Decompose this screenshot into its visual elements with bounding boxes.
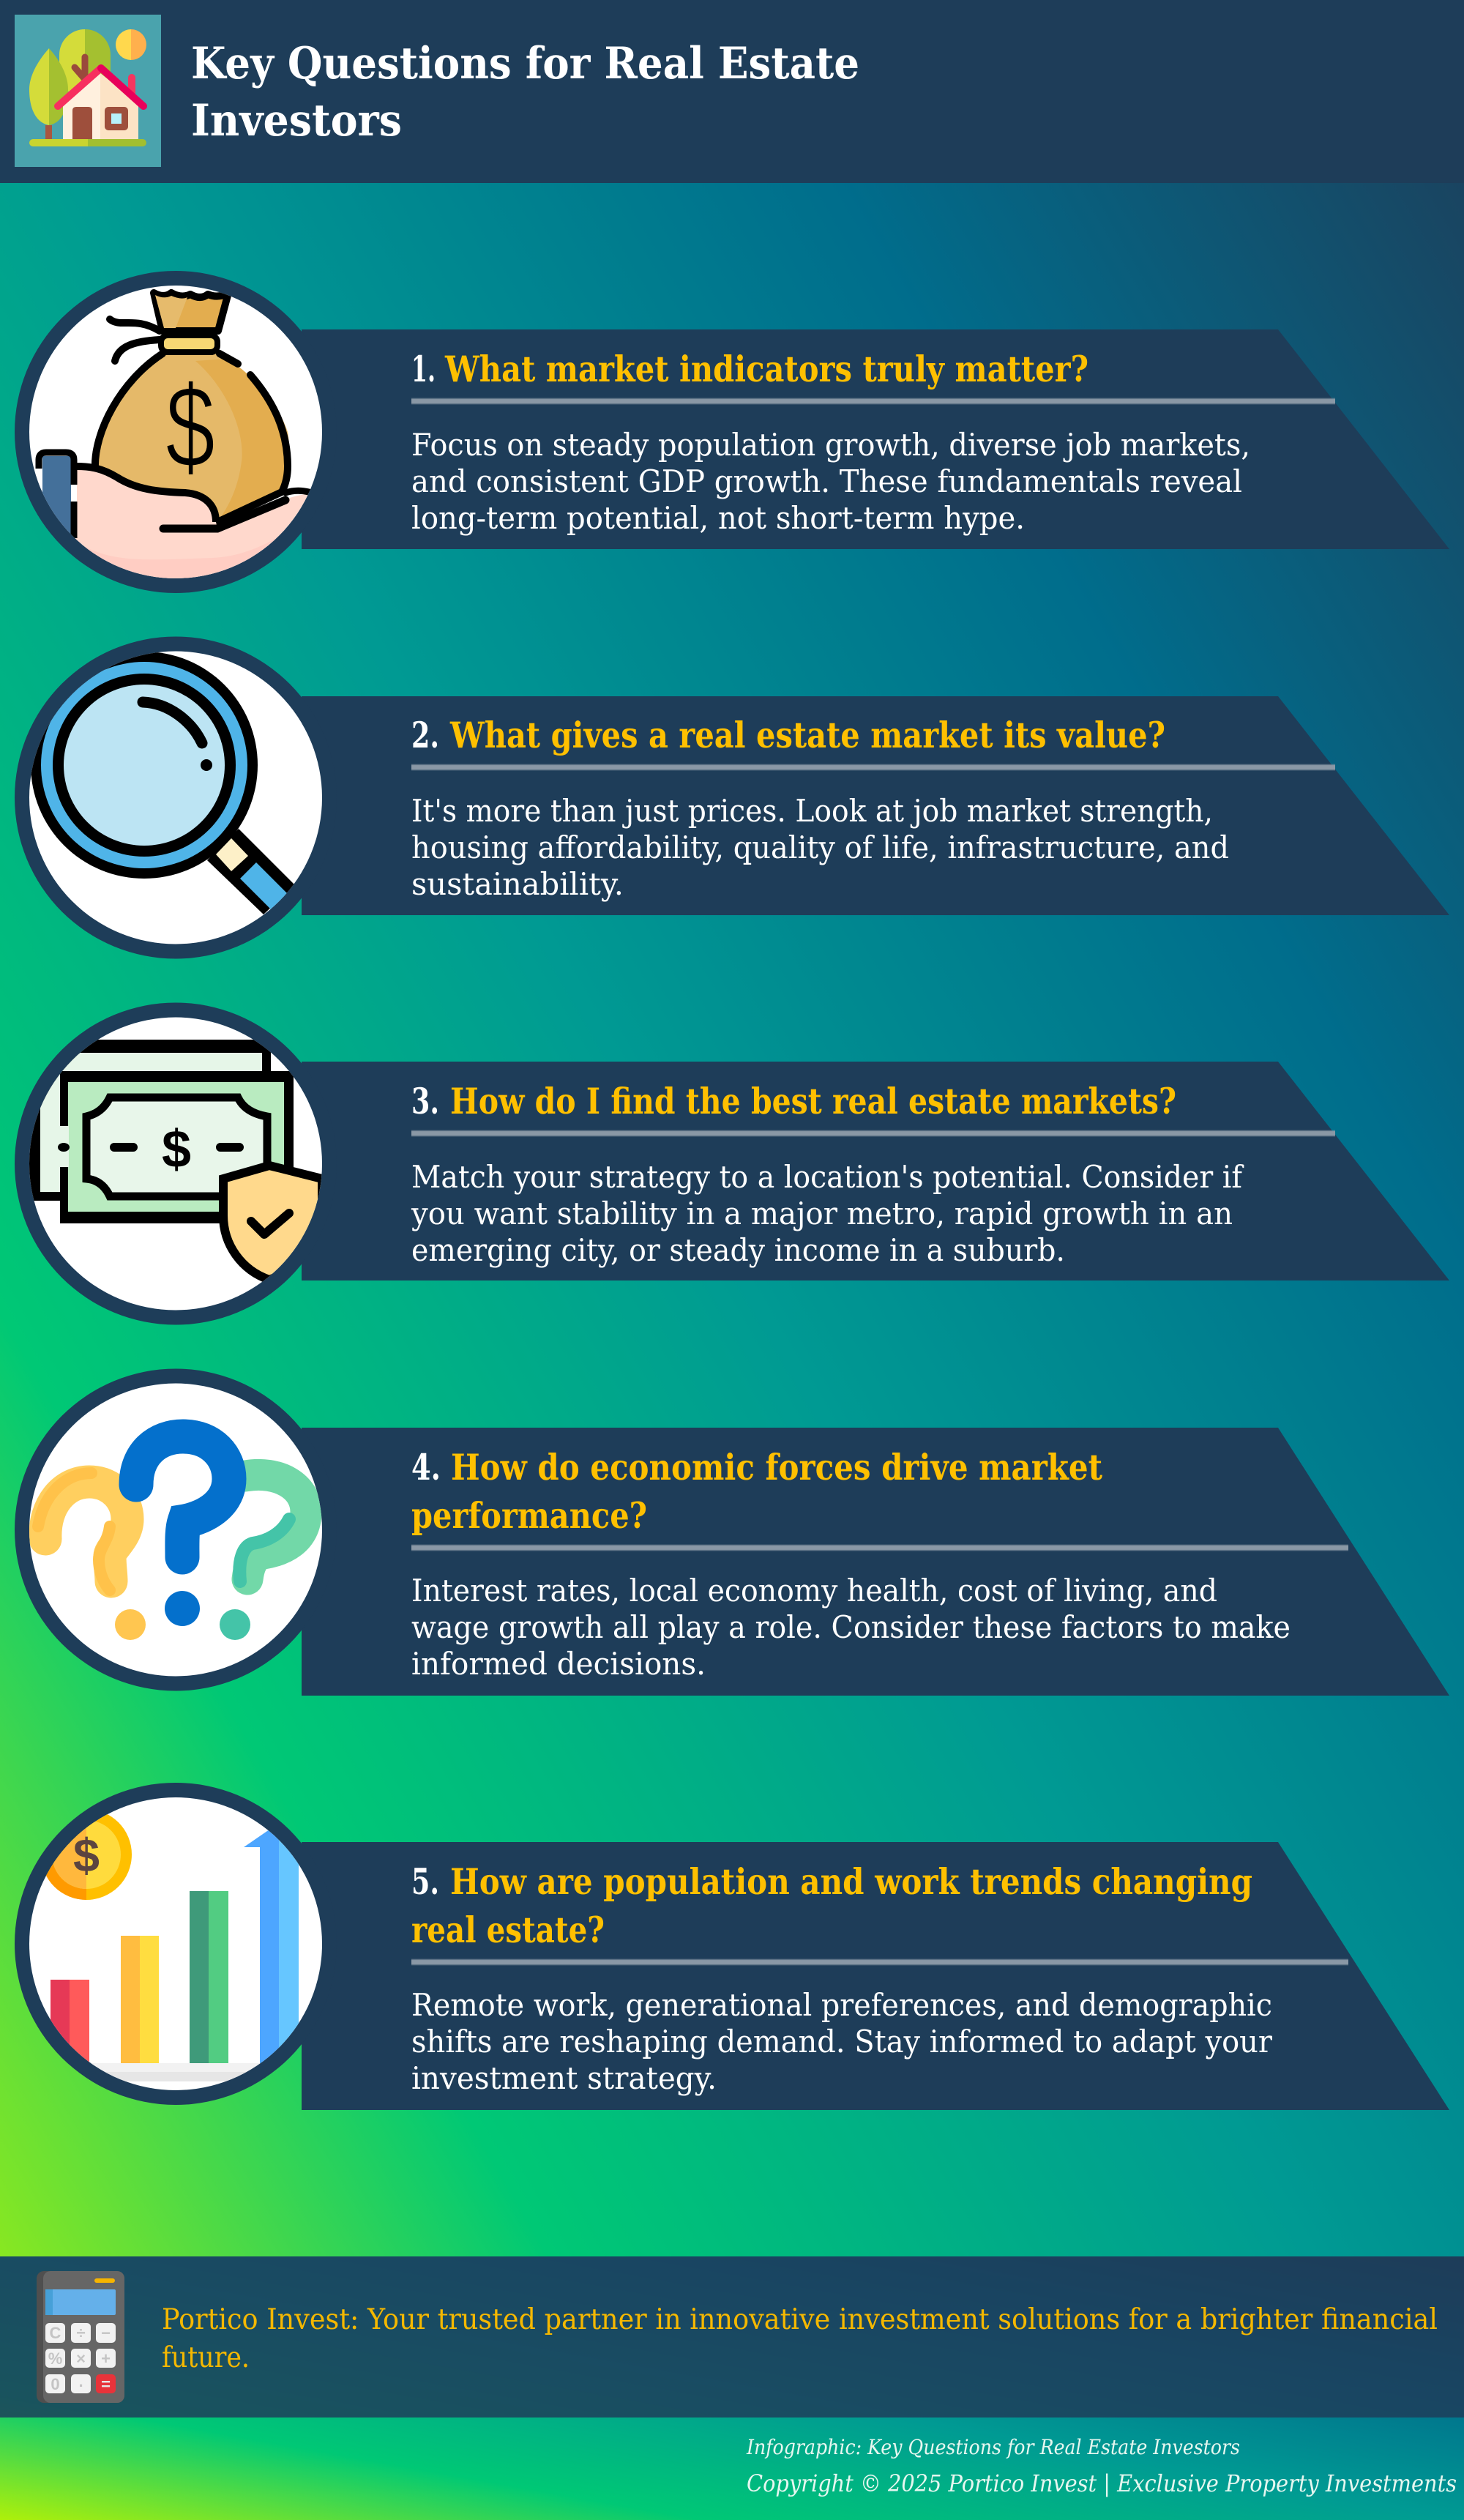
tagline: future. — [162, 2341, 250, 2374]
icon: calculator: % — [48, 2349, 62, 2368]
icon: banknote and shield — [15, 1003, 337, 1325]
body: question 5 — [411, 1987, 1273, 2096]
icon: calculator — [37, 2271, 124, 2403]
icon: calculator: ÷ — [76, 2324, 86, 2342]
icon: magnifying glass — [15, 637, 337, 959]
body: question 1 — [411, 427, 1250, 536]
heading: question 1: What market indicators truly matter? — [444, 348, 1088, 390]
icon: rising bar chart with coin: $ — [73, 1829, 100, 1882]
icon: money bag in hand: $ — [165, 361, 215, 492]
body: question 4: Interest rates, local economy health, cost of living, and — [411, 1573, 1217, 1608]
heading: question 3: How do I find the best real estate markets? — [450, 1080, 1176, 1122]
body: question 1: and consistent GDP growth. These fundamentals reveal — [411, 463, 1242, 499]
body: question 2: sustainability. — [411, 866, 624, 902]
icon: calculator: × — [76, 2349, 86, 2368]
heading: question 1: 1. — [411, 348, 436, 390]
icon: calculator: C — [50, 2324, 61, 2342]
body: question 5: investment strategy. — [411, 2060, 717, 2096]
heading: question 4: 4. — [411, 1446, 441, 1488]
body: question 1: Focus on steady population growth, diverse job markets, — [411, 427, 1250, 463]
title: Key Questions for Real Estate — [191, 38, 859, 89]
icon: calculator: + — [101, 2349, 111, 2368]
body: question 2: housing affordability, quality of life, infrastructure, and — [411, 830, 1229, 865]
panel: question 5 — [15, 1783, 1449, 2110]
header — [0, 0, 1464, 183]
body: question 4 — [411, 1573, 1291, 1682]
icon: calculator: . — [78, 2372, 83, 2390]
body: question 4: informed decisions. — [411, 1646, 706, 1682]
credits — [746, 2435, 1457, 2497]
body: question 1: long-term potential, not short-term hype. — [411, 500, 1025, 536]
body: question 2 — [411, 793, 1229, 902]
body: question 2: It's more than just prices. Look at job market strength, — [411, 793, 1213, 829]
body: question 3: emerging city, or steady income in a suburb. — [411, 1232, 1065, 1268]
icon: calculator: = — [101, 2375, 111, 2393]
heading: question 4: performance? — [411, 1494, 647, 1537]
icon: money bag in hand — [15, 271, 337, 593]
title — [191, 38, 859, 146]
footer background — [0, 2256, 1464, 2520]
icon: rising bar chart with coin — [15, 1783, 337, 2105]
panel: question 4 — [15, 1369, 1449, 1696]
footer band — [0, 2256, 1464, 2418]
heading: question 3: 3. — [411, 1080, 439, 1122]
panel: question 1 — [15, 271, 1449, 593]
title: Investors — [191, 95, 402, 146]
heading: question 2: 2. — [411, 714, 439, 756]
panel: question 3 — [15, 1003, 1449, 1325]
heading: question 5: 5. — [411, 1860, 439, 1903]
icon: banknote and shield: $ — [162, 1120, 191, 1179]
heading: question 4: How do economic forces drive market — [451, 1446, 1102, 1488]
heading: question 5 — [411, 1860, 1252, 1951]
tagline — [162, 2303, 1438, 2374]
icon: calculator: − — [101, 2324, 111, 2342]
body: question 5: shifts are reshaping demand. Stay informed to adapt your — [411, 2024, 1273, 2059]
body: question 4: wage growth all play a role. Consider these factors to make — [411, 1609, 1291, 1645]
icon: question marks — [15, 1369, 337, 1691]
body: question 3: Match your strategy to a location's potential. Consider if — [411, 1159, 1244, 1195]
panel: question 2 — [15, 637, 1449, 959]
icon: calculator: 0 — [51, 2375, 60, 2393]
body: question 3: you want stability in a major metro, rapid growth in an — [411, 1196, 1233, 1231]
heading: question 5: How are population and work trends changing — [450, 1860, 1252, 1903]
heading: question 4 — [411, 1446, 1102, 1537]
credits: Infographic: Key Questions for Real Estate Investors — [746, 2435, 1240, 2459]
heading: question 2: What gives a real estate market its value? — [449, 714, 1165, 756]
body: question 5: Remote work, generational preferences, and demographic — [411, 1987, 1272, 2023]
heading: question 5: real estate? — [411, 1909, 605, 1951]
icon: house logo — [15, 15, 161, 167]
body: question 3 — [411, 1159, 1244, 1268]
